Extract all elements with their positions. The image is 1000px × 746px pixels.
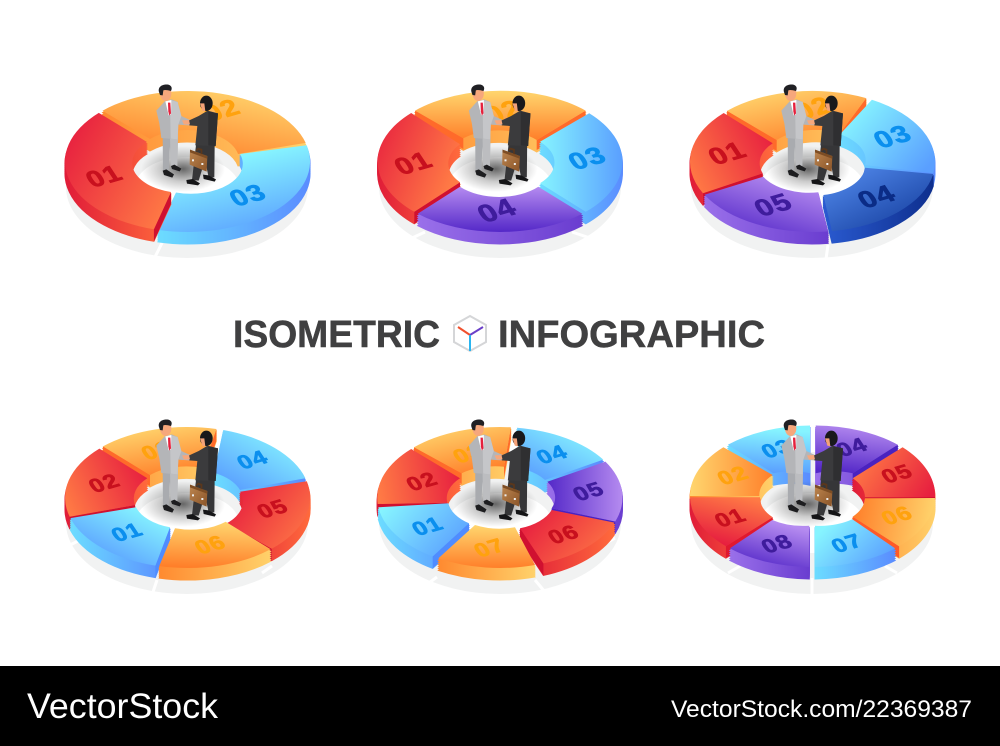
donut B: four segments	[378, 84, 622, 258]
donut D: six segments	[65, 419, 310, 595]
segment 02	[415, 91, 586, 152]
businessmen handshake	[141, 84, 225, 192]
donut E: seven segments	[377, 419, 622, 594]
segment 03: 03	[757, 435, 797, 463]
segment 01	[690, 113, 773, 205]
segment 04: 04	[852, 180, 901, 213]
icon: cube	[454, 316, 486, 351]
segment 03: 03	[562, 141, 612, 175]
segment 06	[159, 522, 271, 580]
segment 04	[418, 187, 582, 244]
segment 04	[214, 430, 305, 502]
segment 01	[65, 113, 171, 242]
segment 01: 01	[702, 136, 752, 170]
segment 02: 02	[478, 95, 528, 128]
segment 04	[823, 168, 933, 243]
segment 02: 02	[84, 470, 125, 497]
title	[233, 314, 765, 356]
title word: infographic: INFOGRAPHIC	[498, 314, 765, 356]
footer brand: VectorStock	[27, 687, 219, 726]
segment 07: 07	[469, 534, 510, 562]
segment 01: 01	[80, 160, 128, 193]
segment 04	[816, 426, 898, 485]
donut C: five segments	[690, 84, 935, 259]
segment 03: 03	[448, 440, 489, 468]
segment 02: 02	[402, 468, 442, 495]
businessmen handshake	[141, 419, 225, 527]
segment 05: 05	[568, 478, 609, 505]
segment 07: 07	[827, 530, 867, 557]
donut F: eight segments	[690, 419, 935, 596]
segment 03	[414, 427, 511, 485]
segment 07	[815, 519, 895, 579]
segment 02	[690, 447, 773, 508]
segment 02	[727, 91, 866, 152]
segment 04: 04	[472, 194, 523, 228]
segment 06: 06	[190, 531, 231, 559]
segment 03	[840, 100, 935, 185]
segment 03: 03	[224, 179, 272, 212]
segment 02: 02	[788, 91, 838, 125]
segment 01	[70, 507, 170, 578]
segment 04: 04	[232, 446, 273, 474]
donut A: three segments	[65, 84, 310, 259]
segment 05	[853, 447, 935, 509]
footer image id: VectorStock.com/22369387	[671, 696, 972, 723]
segment 02	[65, 449, 147, 529]
segment 01	[690, 497, 773, 558]
businessmen handshake	[766, 84, 850, 192]
segment 05	[704, 177, 828, 244]
segment 05: 05	[748, 188, 798, 222]
footer bar	[0, 666, 1000, 746]
segment 01	[378, 113, 460, 224]
segment 03	[158, 145, 310, 244]
segment 03: 03	[137, 437, 177, 464]
businessmen handshake	[454, 84, 538, 192]
segment 04: 04	[532, 441, 572, 468]
segment 02	[377, 449, 460, 516]
segment 03: 03	[868, 120, 917, 153]
segment 03	[728, 426, 810, 485]
segment 08: 08	[757, 530, 797, 558]
segment 03	[103, 427, 216, 487]
segment 06: 06	[543, 521, 584, 548]
segment 06	[520, 510, 614, 575]
segment 05: 05	[877, 460, 917, 488]
segment 05: 05	[252, 495, 293, 523]
segment 04	[517, 428, 603, 492]
segment 05	[547, 462, 622, 534]
segment 04: 04	[832, 434, 872, 461]
businessmen handshake	[766, 419, 850, 527]
segment 01: 01	[107, 519, 147, 546]
segment 03	[540, 113, 622, 224]
segment 01: 01	[407, 513, 448, 540]
segment 05	[227, 481, 310, 561]
segment 06	[853, 498, 935, 558]
segment 06: 06	[877, 502, 917, 529]
segment 02: 02	[198, 94, 246, 127]
segment 02	[102, 91, 306, 166]
segment 07	[438, 525, 535, 580]
segment 02: 02	[713, 462, 753, 489]
segment 01	[378, 503, 469, 568]
segment 08	[730, 520, 809, 579]
segment 01: 01	[710, 504, 751, 532]
businessmen handshake	[454, 419, 538, 527]
segment 01: 01	[388, 146, 438, 180]
title word: isometric: ISOMETRIC	[233, 314, 440, 356]
